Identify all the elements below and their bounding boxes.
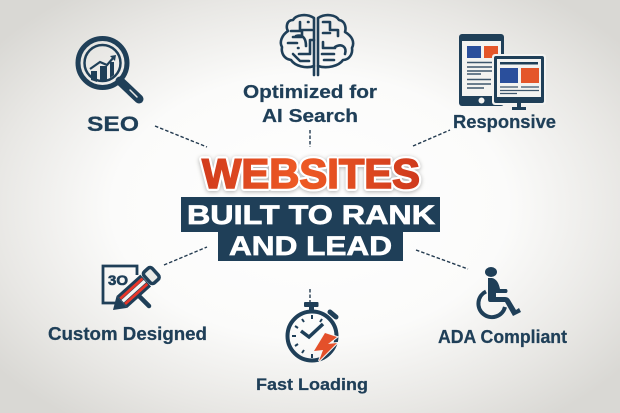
icon: responsive devices	[459, 34, 546, 110]
dashed connector: Fast Loading	[309, 289, 311, 302]
title: WEBSITES: WEBSITES	[202, 150, 420, 197]
label: Custom Designed: Custom Designed	[48, 324, 207, 344]
label: ADA Compliant: ADA Compliant	[438, 327, 567, 347]
label: Fast Loading: Fast Loading	[256, 375, 368, 394]
subtitle banner: BUILT TO RANK	[187, 200, 436, 230]
dashed connector: SEO	[155, 126, 207, 147]
icon: brain circuit	[281, 15, 353, 75]
icon: custom design pencil: 3O	[108, 272, 128, 288]
dashed connector: Responsive	[413, 130, 450, 146]
label: Optimized for AI Search: Optimized for	[243, 82, 377, 102]
icon: wheelchair	[478, 267, 521, 317]
title: WEBSITES: WEBSITES	[202, 150, 420, 197]
dashed connector: AI Search	[309, 130, 311, 147]
dashed connector: ADA Compliant	[416, 250, 468, 269]
icon: stopwatch with lightning	[288, 302, 337, 361]
icon: SEO magnifier	[78, 38, 139, 99]
subtitle banner: AND LEAD	[229, 231, 392, 261]
dashed connector: Custom Designed	[164, 247, 207, 265]
label: Responsive: Responsive	[453, 112, 556, 132]
label: Optimized for AI Search: AI Search	[262, 106, 358, 126]
label: SEO: SEO	[87, 113, 139, 136]
icon: custom design pencil	[103, 266, 161, 316]
subtitle banner	[181, 197, 440, 261]
label: Optimized for AI Search	[243, 82, 377, 126]
